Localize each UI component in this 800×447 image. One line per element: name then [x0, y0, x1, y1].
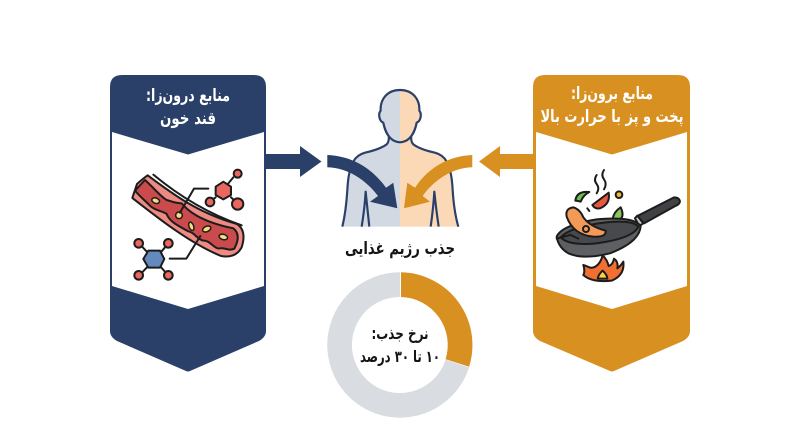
panel white area — [112, 132, 264, 309]
torso outline — [342, 90, 458, 227]
heading: endogenous sources: منابع درون‌زا: — [146, 86, 230, 106]
icon: human torso — [342, 90, 458, 227]
torso left half — [342, 90, 400, 227]
arrow: orange curved into torso — [404, 155, 472, 208]
heading: exogenous sources: پخت و پز با حرارت بالا — [540, 107, 684, 127]
heading: exogenous sources: منابع برون‌زا: — [571, 84, 653, 104]
torso right half — [400, 90, 458, 227]
icon: blood vessel with molecules — [132, 170, 244, 280]
donut label — [360, 324, 440, 366]
donut label: نرخ جذب: — [372, 324, 428, 343]
heading: exogenous sources — [540, 84, 684, 127]
heading: endogenous sources: قند خون — [160, 109, 216, 129]
panel: endogenous sources — [110, 75, 266, 372]
panel white area — [536, 132, 687, 309]
donut chart: absorption rate — [327, 272, 472, 418]
donut label: ۱۰ تا ۳۰ درصد — [360, 347, 440, 366]
heading: endogenous sources — [146, 86, 230, 129]
panel background — [533, 75, 690, 372]
donut remainder — [327, 272, 469, 418]
arrow: navy curved into torso — [327, 155, 397, 208]
arrow: navy connector to body — [266, 146, 322, 177]
panel background — [110, 75, 266, 372]
donut share 30 percent — [401, 272, 472, 367]
label: dietary absorption: جذب رژیم غذایی — [345, 239, 455, 259]
icon: frying pan over flame — [557, 170, 680, 281]
arrow: orange connector to body — [479, 146, 533, 177]
panel: exogenous sources — [533, 75, 690, 372]
